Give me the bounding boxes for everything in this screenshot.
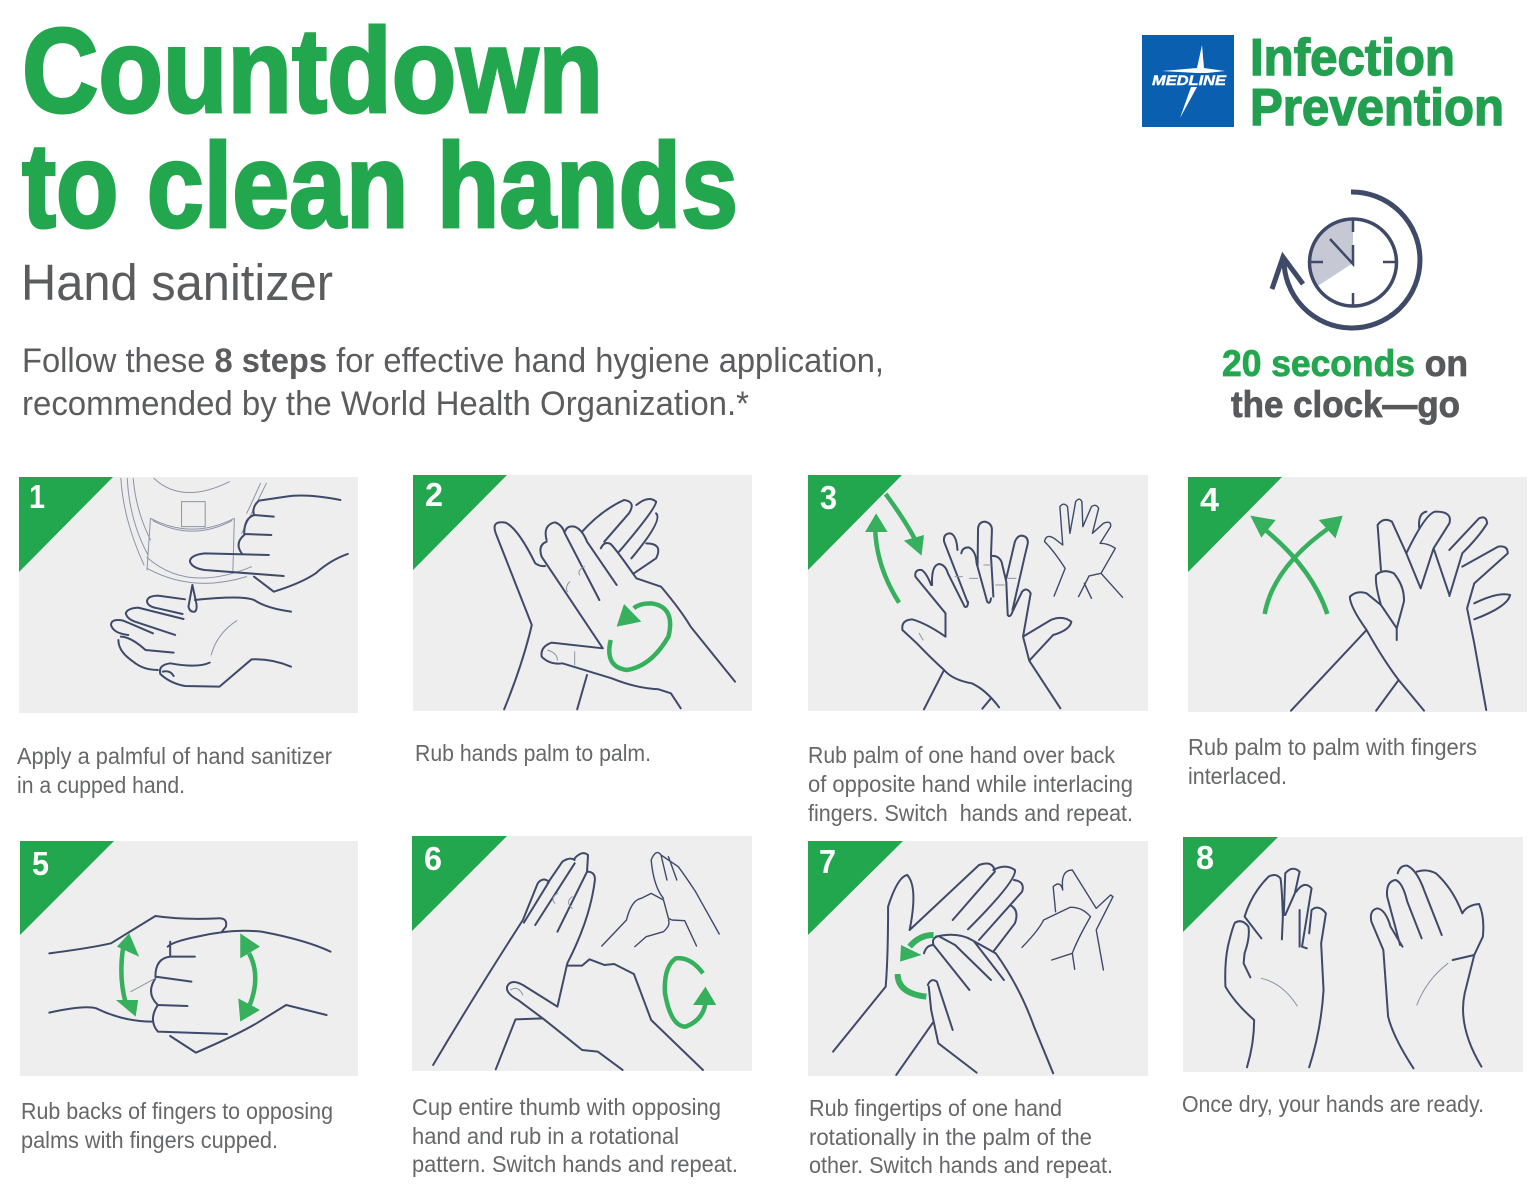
step 3 text [808, 742, 1133, 826]
step 6 text [412, 1094, 738, 1177]
clock caption: the clock—go [1231, 384, 1460, 425]
step 7 text: rotationally in the palm of the [809, 1124, 1092, 1150]
step 1 text: Apply a palmful of hand sanitizer [17, 743, 332, 769]
step 3 text: Rub palm of one hand over back [808, 742, 1115, 768]
icon: clock [1272, 192, 1420, 328]
title [22, 4, 738, 253]
panel: step 6: 6 [424, 840, 442, 877]
arrow: rotate [898, 935, 934, 997]
step 5 text [21, 1098, 333, 1153]
logo: Medline [1142, 35, 1234, 127]
brand name: Prevention [1250, 79, 1504, 137]
panel: step 5: 5 [32, 845, 49, 882]
intro text [22, 342, 884, 423]
logo: Medline: MEDLINE [1152, 72, 1227, 88]
panel: step 8 [1183, 837, 1523, 1072]
panel: step 4: 4 [1200, 481, 1220, 518]
arrow: rotate [665, 958, 716, 1027]
step 4 text: Rub palm to palm with fingers [1188, 734, 1477, 760]
panel: step 8: 8 [1196, 839, 1214, 876]
title: Countdown [22, 4, 603, 138]
illustration: backs of fingers [49, 916, 331, 1053]
step 7 text: Rub fingertips of one hand [809, 1095, 1062, 1121]
step 6 text: hand and rub in a rotational [412, 1123, 679, 1149]
panel: step 2: 2 [425, 476, 443, 513]
illustration: cup thumb [433, 853, 719, 1070]
intro text: Follow these 8 steps for effective hand hygiene application, [22, 342, 884, 380]
panel: step 1 [19, 477, 358, 713]
illustration: fingertips in palm [833, 863, 1113, 1075]
title: to clean hands [22, 119, 738, 253]
step 4 text [1188, 734, 1477, 789]
step 5 text: palms with fingers cupped. [21, 1127, 278, 1153]
arrow: rotate [609, 603, 670, 670]
step 1 text: in a cupped hand. [17, 772, 185, 798]
panel: step 4 [1188, 477, 1527, 712]
panel: step 2 [413, 475, 752, 711]
step 8 text: Once dry, your hands are ready. [1182, 1091, 1484, 1117]
illustration: interlaced over back of hand [865, 494, 1123, 709]
panel: step 1: 1 [29, 478, 45, 515]
panel: step 7 [808, 841, 1148, 1076]
illustration: palm to palm [495, 499, 735, 709]
intro text: recommended by the World Health Organization.* [22, 385, 749, 423]
step 7 text [809, 1095, 1113, 1178]
illustration: hand under dispenser [111, 478, 348, 687]
brand name [1250, 29, 1504, 137]
step 7 text: other. Switch hands and repeat. [809, 1152, 1113, 1178]
subtitle: Hand sanitizer [21, 254, 333, 311]
step 4 text: interlaced. [1188, 763, 1287, 789]
arrow: crossed [1250, 516, 1343, 614]
panel: step 5 [20, 841, 358, 1076]
step 3 text: of opposite hand while interlacing [808, 771, 1133, 797]
panel: step 7: 7 [819, 843, 836, 880]
brand name: Infection [1250, 29, 1455, 87]
panel: step 6 [412, 836, 752, 1071]
panel: step 3 [808, 475, 1148, 711]
arrow: up and down [865, 494, 924, 603]
step 6 text: pattern. Switch hands and repeat. [412, 1151, 738, 1177]
step 2 text: Rub hands palm to palm. [415, 740, 651, 766]
illustration: fingers interlaced [1250, 512, 1510, 711]
step 3 text: fingers. Switch hands and repeat. [808, 800, 1133, 826]
step 1 text [17, 743, 332, 798]
arrow: up and down [116, 933, 260, 1022]
step 6 text: Cup entire thumb with opposing [412, 1094, 721, 1120]
clock caption: 20 seconds on [1222, 343, 1468, 384]
illustration: open dry hands [1225, 866, 1483, 1068]
clock caption [1222, 343, 1468, 425]
panel: step 3: 3 [820, 479, 837, 516]
step 5 text: Rub backs of fingers to opposing [21, 1098, 333, 1124]
